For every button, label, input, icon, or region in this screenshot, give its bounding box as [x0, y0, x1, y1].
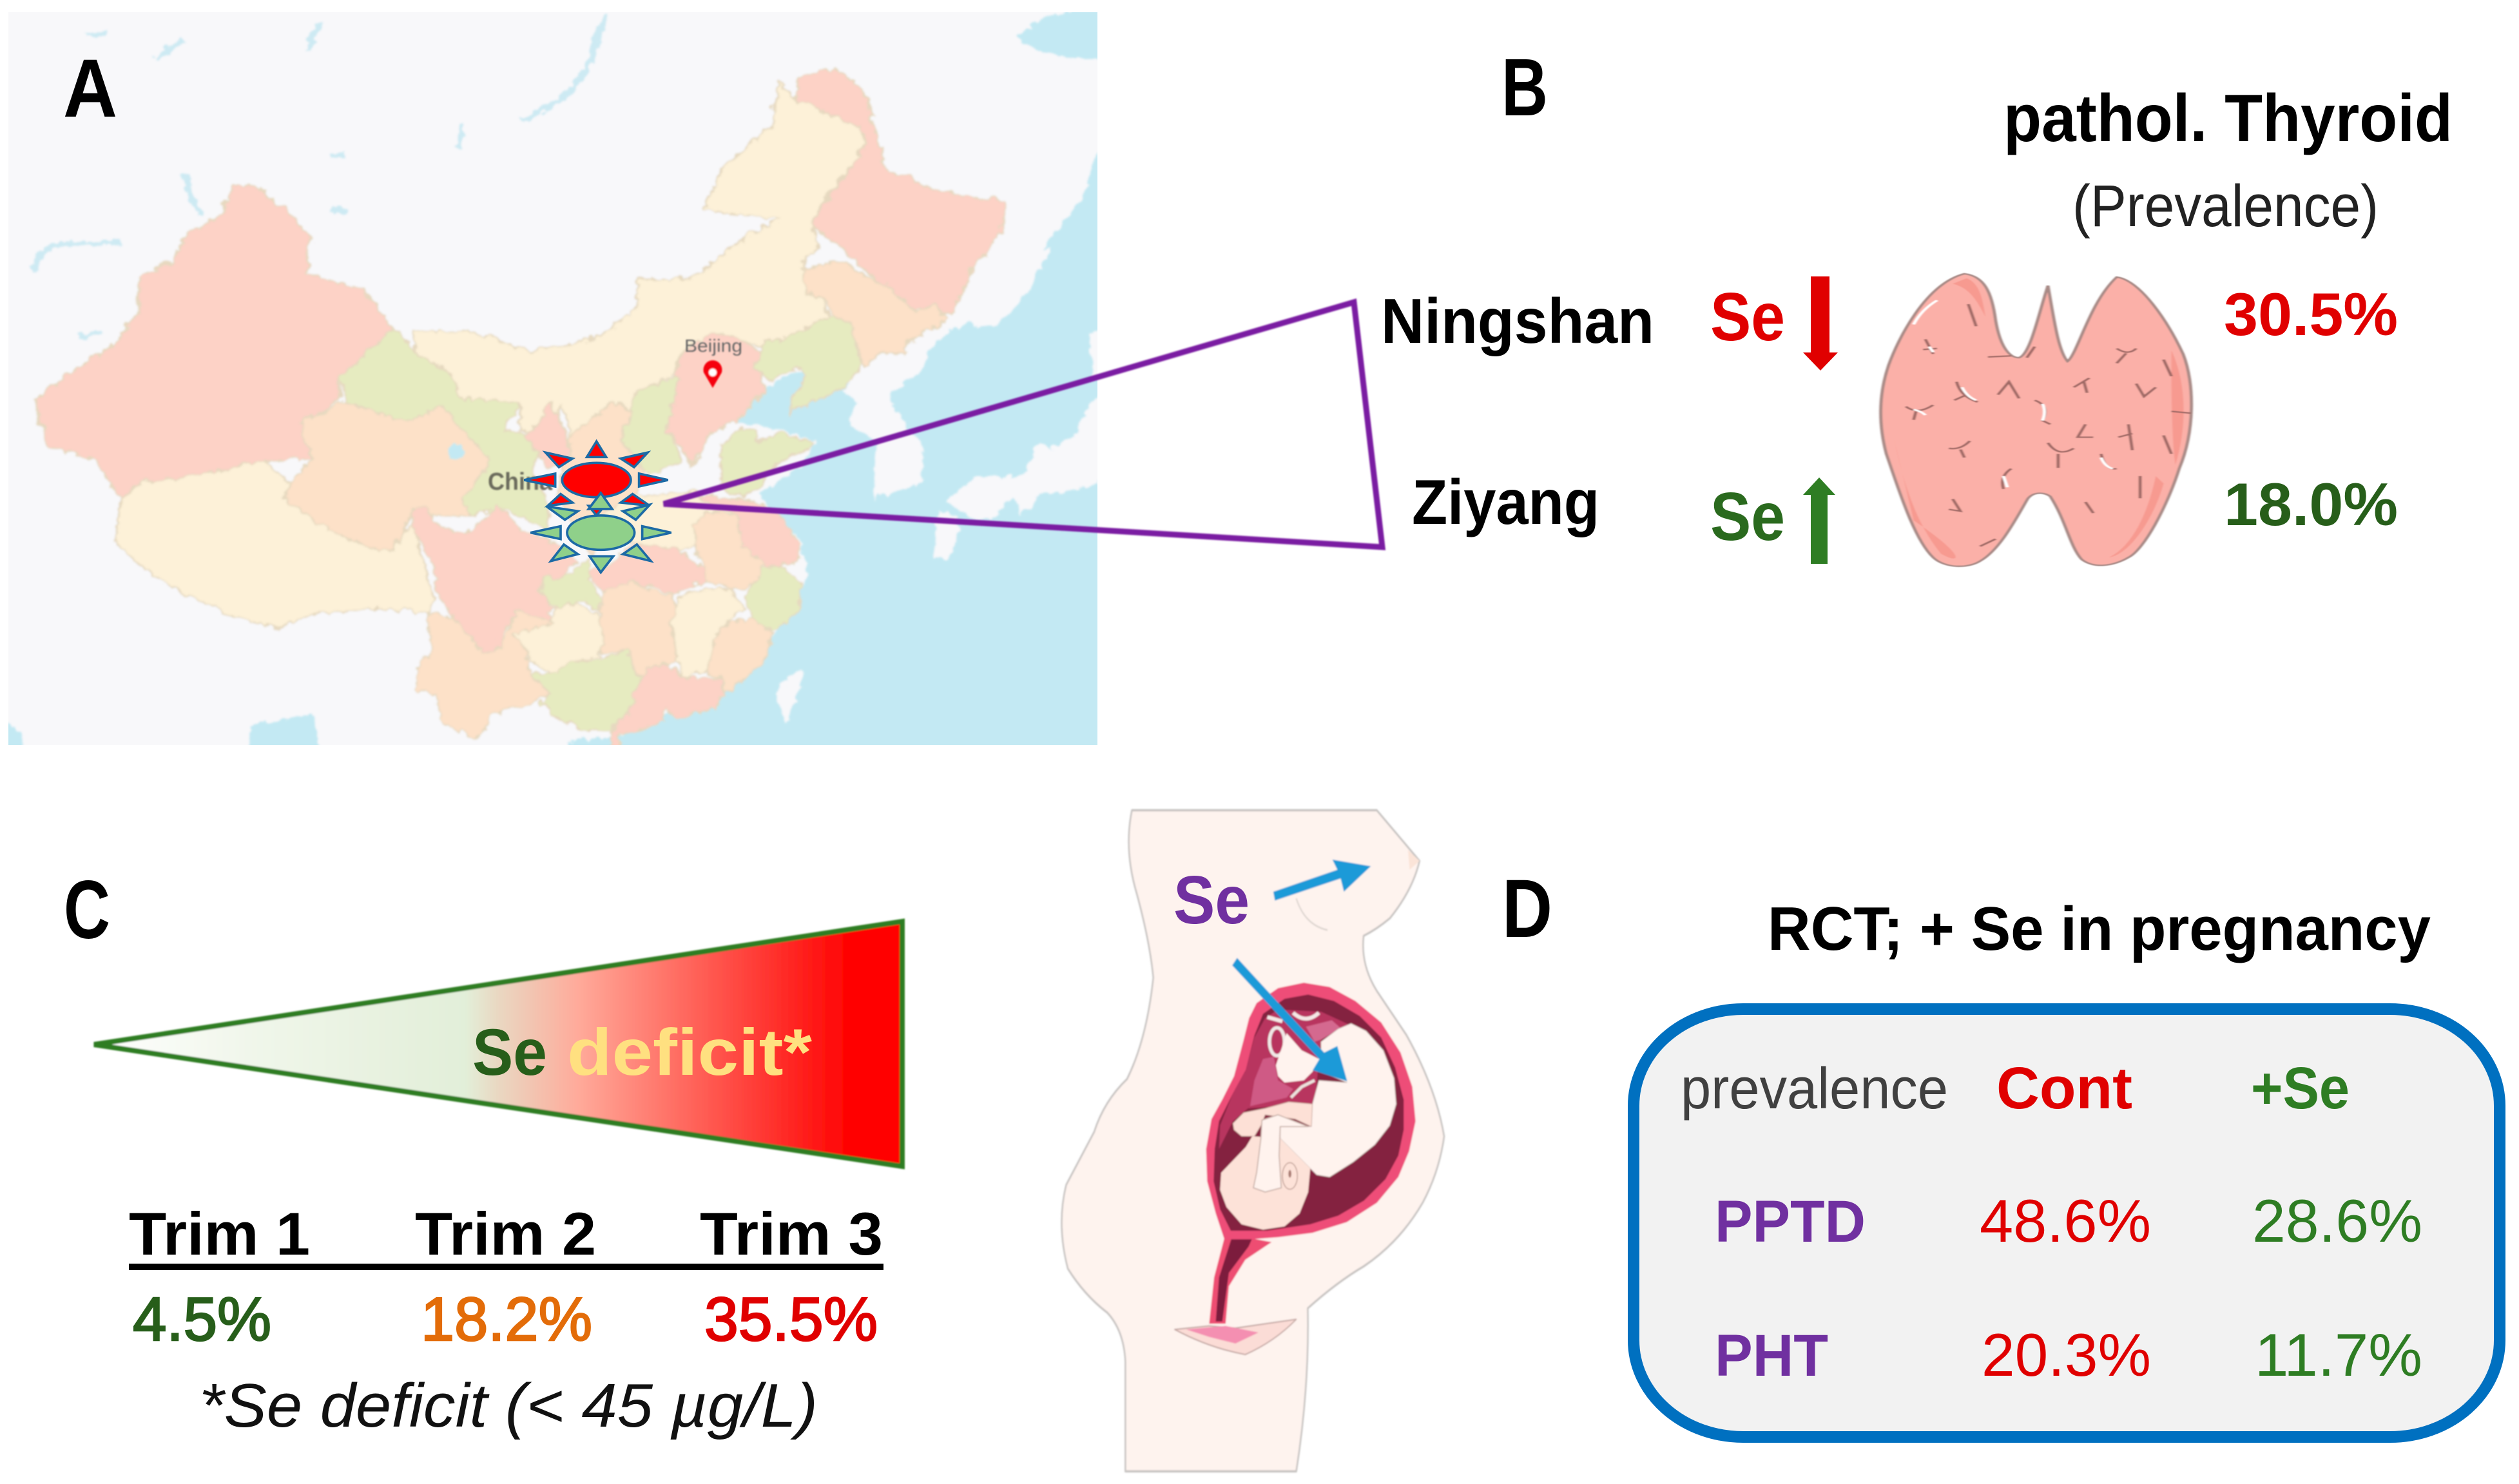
arrow to breast	[1273, 860, 1371, 901]
fetus toe	[1288, 1170, 1291, 1178]
value: 4.5%: 4.5%	[133, 1285, 271, 1354]
table box	[1634, 1009, 2500, 1437]
panel: pregnant body illustration	[1061, 810, 1444, 1471]
sea	[8, 12, 1097, 745]
subheading: Prevalence: (Prevalence)	[2072, 173, 2379, 239]
column: prevalence: prevalence	[1681, 1057, 1948, 1121]
label: Se low: Se	[1710, 279, 1785, 355]
column: Cont: Cont	[1996, 1055, 2132, 1121]
panel B: thyroid prevalence	[1381, 42, 2453, 566]
heading: pathol. Thyroid: pathol. Thyroid	[2003, 81, 2453, 156]
placenta	[1306, 1020, 1340, 1042]
fetus leg	[1253, 1115, 1308, 1192]
row: PPTD: PPTD	[1715, 1189, 1866, 1255]
illustration	[1061, 810, 1444, 1471]
placenta lower	[1250, 1057, 1293, 1106]
value: Ziyang 18.0%: 18.0%	[2224, 470, 2398, 538]
body silhouette	[1061, 810, 1444, 1471]
body outline frame	[1061, 810, 1444, 1471]
nipple	[1408, 850, 1420, 870]
label: Ziyang: Ziyang	[1412, 467, 1599, 537]
neighbouring land: Russia and Korea, Japan	[840, 246, 1109, 557]
heading: C: C	[64, 864, 110, 956]
footnote: *Se deficit (< 45 µg/L)	[199, 1371, 818, 1440]
amniotic cord rings	[1269, 1028, 1284, 1055]
label: Se high: Se	[1710, 479, 1785, 555]
heading: RCT: RCT; + Se in pregnancy	[1768, 894, 2431, 963]
arrows frame	[1232, 860, 1371, 1081]
label: Beijing: Beijing	[684, 336, 742, 356]
upper cavity tissue	[1219, 1010, 1349, 1149]
table head: Trim 3: Trim 3	[700, 1200, 883, 1267]
value: PPTD Se: 28.6%	[2252, 1187, 2422, 1255]
value: 35.5%: 35.5%	[704, 1285, 878, 1354]
table head: Trim 2: Trim 2	[415, 1200, 596, 1267]
heading: A: A	[63, 43, 117, 135]
provinces north and west	[32, 66, 1003, 626]
map land background	[0, 0, 1160, 805]
icon: thyroid gland	[1880, 274, 2192, 566]
row: PHT: PHT	[1715, 1323, 1828, 1389]
heading: D: D	[1502, 863, 1552, 955]
value: PHT control: 20.3%	[1982, 1321, 2151, 1389]
value: PHT Se: 11.7%	[2255, 1321, 2422, 1389]
provinces south and central	[409, 490, 800, 747]
label: Se: Se	[472, 1016, 547, 1089]
label: Ningshan: Ningshan	[1381, 285, 1654, 356]
cord top	[1268, 1013, 1319, 1021]
label: Se: Se	[1173, 862, 1250, 938]
fetus foot	[1282, 1162, 1297, 1190]
vagina wall	[1209, 1233, 1271, 1324]
provinces northeast and Shandong	[718, 258, 945, 495]
panel D: RCT table	[1502, 863, 2500, 1437]
value: PPTD control: 48.6%	[1980, 1187, 2151, 1255]
icon: up arrow green	[1803, 477, 1835, 564]
breast line	[1297, 898, 1327, 930]
inland water	[32, 12, 603, 335]
fetus back and head	[1280, 1023, 1396, 1177]
uterus wall	[1206, 983, 1416, 1239]
icon: green sun Ziyang	[530, 493, 671, 572]
table head: Trim 1: Trim 1	[129, 1200, 310, 1267]
column: +Se: +Se	[2251, 1055, 2350, 1121]
fetus arm	[1233, 1102, 1313, 1136]
arrow to fetus	[1232, 958, 1347, 1081]
uterine cavity	[1213, 994, 1404, 1231]
cord stub	[1291, 1081, 1315, 1097]
lake: Qinghai	[445, 441, 463, 456]
value: 18.2%: 18.2%	[421, 1285, 592, 1354]
uterus frame	[1206, 983, 1416, 1239]
label: deficit: deficit*	[567, 1016, 812, 1089]
map	[8, 12, 1097, 745]
wedge: Se deficit gradient	[94, 921, 902, 1166]
icon: down arrow red	[1803, 276, 1838, 371]
table rule	[129, 1264, 883, 1270]
label: China: China	[488, 468, 553, 496]
panel A: map of China	[8, 12, 1097, 745]
cervix canal	[1216, 1231, 1253, 1322]
fetus lower body	[1220, 1136, 1310, 1229]
inner pink	[1186, 1326, 1259, 1344]
fetus face	[1276, 1033, 1319, 1083]
value: Ningshan 30.5%: 30.5%	[2224, 280, 2398, 348]
icon: Beijing map pin	[704, 360, 722, 388]
connector: purple callout triangle	[664, 302, 1382, 547]
heading: B: B	[1501, 42, 1548, 133]
panel C: Se deficit by trimester	[64, 864, 902, 1440]
icon: red sun Ningshan	[524, 441, 668, 516]
vulva	[1175, 1319, 1297, 1354]
